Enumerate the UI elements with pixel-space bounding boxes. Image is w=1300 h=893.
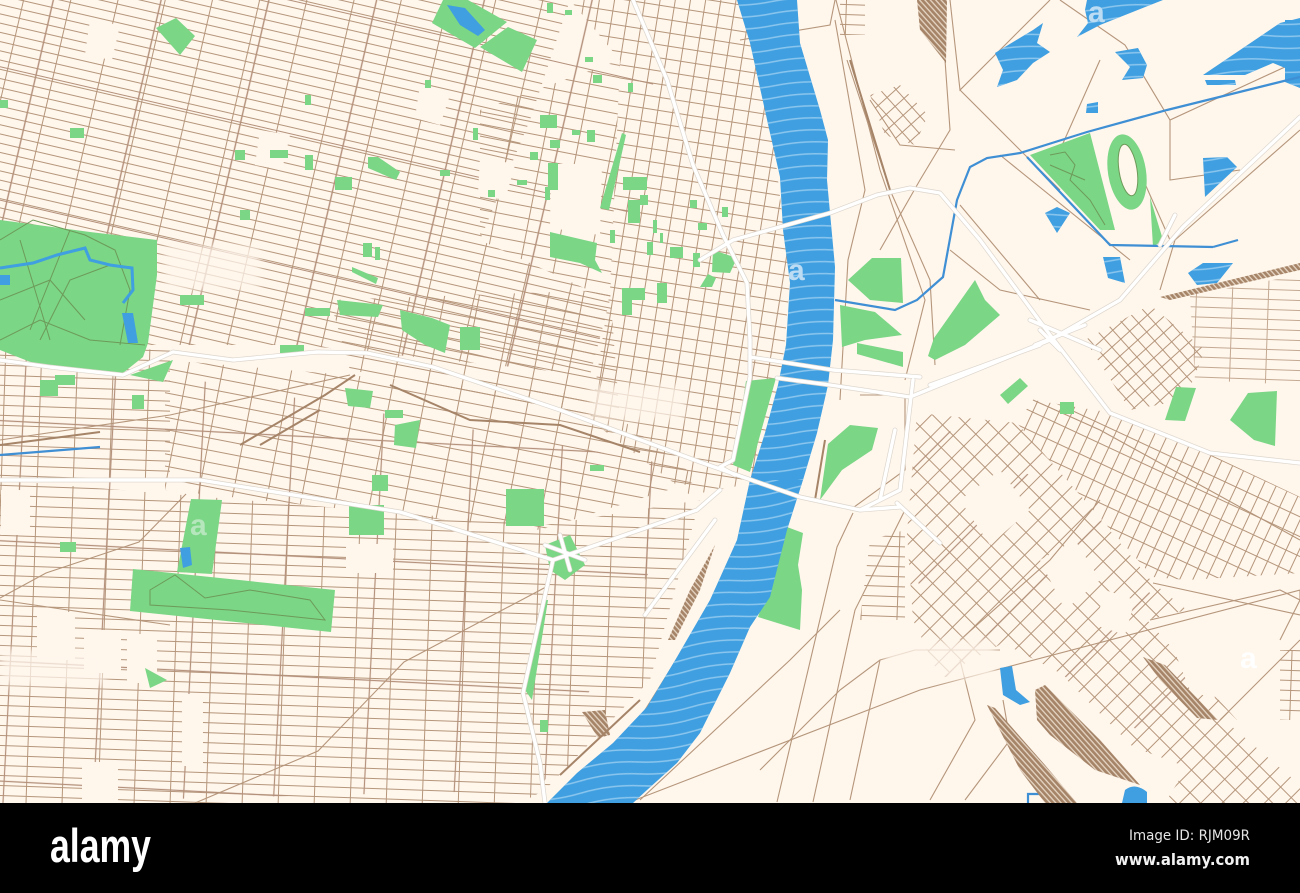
- park: small lots: [0, 3, 1074, 732]
- website: www.alamy.com: [1115, 850, 1250, 869]
- footer bar: [0, 803, 1300, 893]
- river waves: [547, 0, 835, 803]
- rail yard south: [987, 705, 1077, 803]
- park: Forest Park corner: [130, 360, 173, 382]
- park: botanical garden: [177, 499, 222, 574]
- park: interchange green: [525, 250, 737, 700]
- rail yard east: [1143, 657, 1218, 720]
- rail wedge north: [917, 0, 947, 63]
- watermark letters: a: [788, 254, 805, 287]
- watermark letters: a: [190, 509, 207, 542]
- river: [547, 0, 835, 803]
- watermark wash: [0, 245, 995, 685]
- park: north city parks: [145, 0, 667, 688]
- park: riverfront: [733, 378, 803, 630]
- park: east bank parks: [820, 133, 1277, 500]
- image id: Image ID: RJM09R: [1129, 828, 1250, 844]
- rail yard south-east: [1035, 685, 1140, 785]
- park: Forest Park: [0, 220, 157, 373]
- Forest Park stream: [0, 248, 133, 303]
- rail yard riverside: [668, 545, 715, 640]
- freight rail yards: [582, 0, 1300, 803]
- park: Tower Grove Park: [130, 569, 335, 632]
- lakes in Forest Park: [0, 5, 1147, 803]
- logo: alamy: alamy: [50, 819, 151, 872]
- rail lines: [0, 60, 890, 775]
- watermark letters: a: [1240, 642, 1257, 675]
- rail yard south riverside: [582, 710, 610, 738]
- racetrack: [1107, 134, 1147, 210]
- trails in parks: [0, 152, 1105, 620]
- north-east lakes: [995, 0, 1300, 285]
- rail east edge: [1160, 263, 1300, 300]
- watermark letters: [190, 0, 1257, 675]
